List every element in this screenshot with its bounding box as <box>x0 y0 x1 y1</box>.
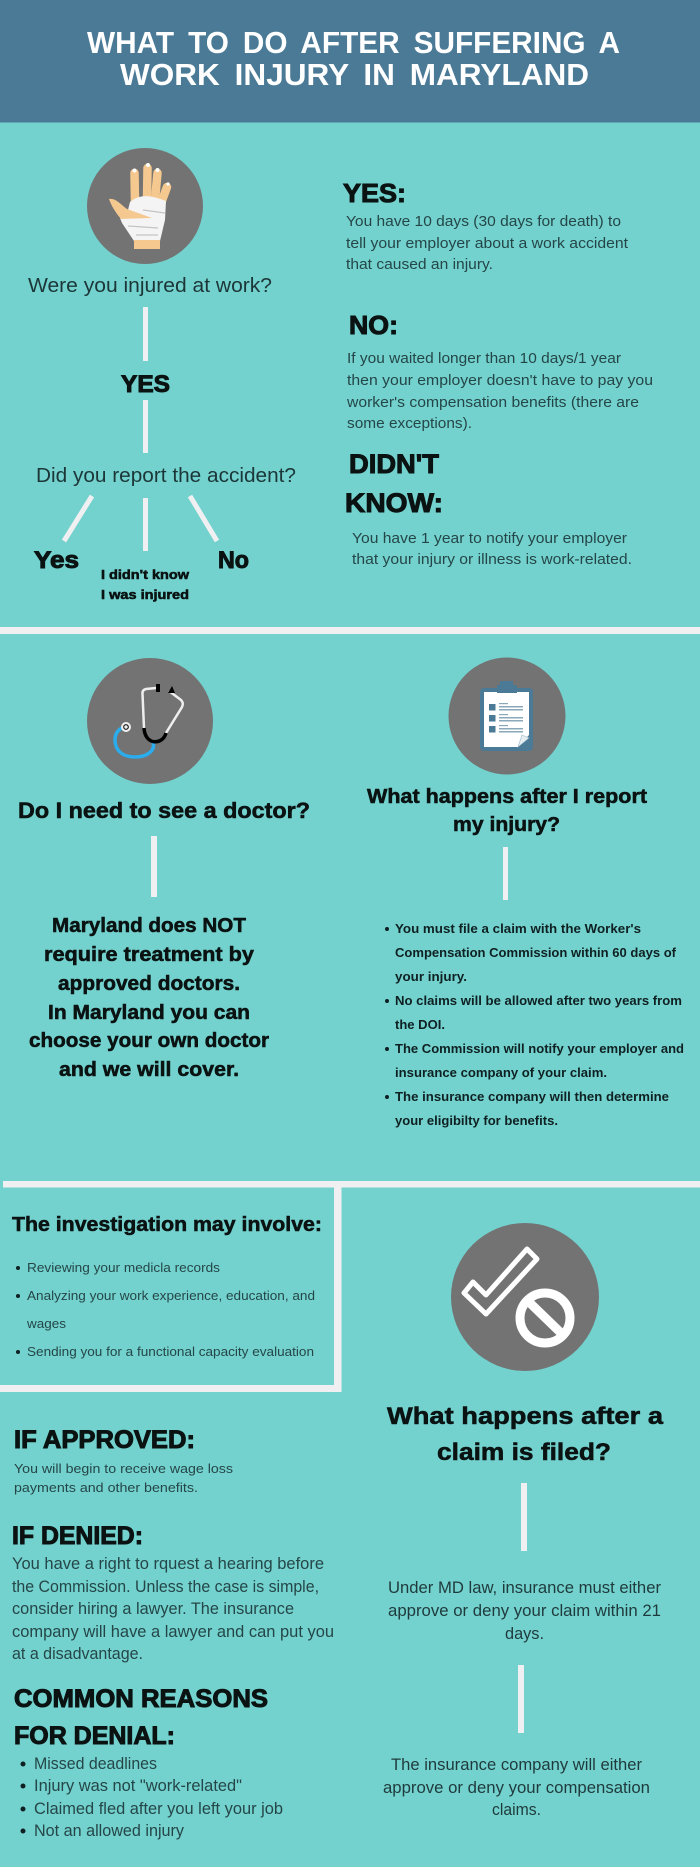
text: denied details <box>12 1555 334 1663</box>
connector line <box>143 400 148 453</box>
list: report steps: insurance company of your claim. <box>395 1065 607 1080</box>
header banner with title: WHAT TO DO AFTER SUFFERING A <box>87 25 620 60</box>
list: investigation items: Analyzing your work experience, education, and <box>27 1288 315 1303</box>
text: didn't know answer: You have 1 year to notify your employer <box>352 531 627 547</box>
text: denied details: the Commission. Unless the case is simple, <box>12 1578 319 1596</box>
text: no answer: some exceptions). <box>347 416 472 432</box>
icon: clipboard <box>448 658 566 774</box>
panel: approval and denial <box>12 1426 334 1840</box>
list: report steps <box>385 921 684 1128</box>
text: yes answer: tell your employer about a work accident <box>346 236 628 252</box>
text: yes answer: that caused an injury. <box>346 257 493 273</box>
header banner with title <box>0 0 700 122</box>
text: denied details: consider hiring a lawyer. The insurance <box>12 1600 294 1618</box>
answer: I didn't know: I was injured <box>101 587 189 602</box>
text: yes answer: You have 10 days (30 days for death) to <box>346 214 621 230</box>
text: no answer <box>346 351 653 432</box>
heading: NO: NO: <box>349 310 398 340</box>
answer: I didn't know: I didn't know <box>101 567 190 582</box>
text: no answer: then your employer doesn't have to pay you <box>347 373 653 389</box>
text: didn't know answer <box>352 531 632 568</box>
text: approved details: payments and other benefits. <box>14 1480 198 1495</box>
heading: DIDN'T KNOW <box>345 449 443 518</box>
text: 21 days rule: days. <box>505 1625 544 1643</box>
text: denied details: company will have a lawyer and can put you <box>12 1623 334 1641</box>
list: denial reasons <box>20 1755 283 1840</box>
connector line <box>521 1483 527 1551</box>
list: report steps: the DOI. <box>395 1017 445 1032</box>
list: investigation items: Sending you for a functional capacity evaluation <box>27 1344 314 1359</box>
list: report steps: You must file a claim with the Worker's <box>395 921 641 936</box>
text: Maryland doctor answer: and we will cover. <box>59 1058 239 1081</box>
text: denied details: You have a right to rquest a hearing before <box>12 1555 324 1573</box>
list: investigation items: Reviewing your medicla records <box>27 1260 220 1275</box>
panel: investigation box <box>0 1187 342 1392</box>
heading: common reasons: COMMON REASONS <box>14 1685 268 1713</box>
text: Maryland doctor answer: Maryland does NOT <box>52 914 246 937</box>
list: investigation items <box>16 1260 315 1359</box>
heading: claim filed: What happens after a <box>387 1403 663 1430</box>
question: report accident: Did you report the accident? <box>36 464 296 487</box>
answer: I didn't know <box>101 567 190 602</box>
panel: what happens after I report <box>367 658 684 1128</box>
text: approved details <box>14 1461 233 1495</box>
list: report steps: your eligibilty for benefits. <box>395 1113 558 1128</box>
text: 21 days rule: approve or deny your claim within 21 <box>388 1602 661 1620</box>
list: investigation items: wages <box>26 1316 66 1331</box>
heading: after I report <box>367 785 647 836</box>
text: insurer decision: approve or deny your compensation <box>383 1779 650 1797</box>
list: denial reasons: Missed deadlines <box>34 1755 157 1773</box>
list: denial reasons: Not an allowed injury <box>34 1822 185 1840</box>
connector line <box>151 836 157 897</box>
text: Maryland doctor answer: choose your own doctor <box>29 1029 269 1052</box>
heading: after I report: my injury? <box>453 813 560 836</box>
list: report steps: No claims will be allowed after two years from <box>395 993 682 1008</box>
text: Maryland doctor answer <box>29 914 269 1081</box>
text: insurer decision <box>383 1756 650 1819</box>
question: injured at work: Were you injured at work? <box>28 274 272 297</box>
header banner with title: WORK INJURY IN MARYLAND <box>120 57 589 92</box>
heading: if approved: IF APPROVED: <box>14 1426 195 1454</box>
heading: claim filed: claim is filed? <box>437 1439 611 1466</box>
text: approved details: You will begin to receive wage loss <box>14 1461 233 1476</box>
panel: what happens after a claim is filed <box>383 1223 663 1819</box>
heading: common reasons: FOR DENIAL: <box>14 1722 175 1750</box>
text: yes answer <box>346 214 628 273</box>
heading: investigation: The investigation may involve: <box>12 1213 322 1236</box>
label: YES: YES <box>121 371 170 398</box>
text: insurer decision: The insurance company will either <box>391 1756 643 1774</box>
panel: right column answers <box>343 178 653 568</box>
connector line <box>518 1665 524 1733</box>
heading: common reasons <box>14 1685 268 1750</box>
text: Maryland doctor answer: In Maryland you can <box>48 1001 250 1024</box>
list: denial reasons: Injury was not "work-related" <box>34 1777 242 1795</box>
heading: YES: YES: <box>343 178 406 208</box>
heading: doctor question: Do I need to see a doctor? <box>18 798 310 823</box>
answer: No: No <box>218 547 249 574</box>
text: no answer: If you waited longer than 10 days/1 year <box>347 351 621 367</box>
text: denied details: at a disadvantage. <box>12 1645 143 1663</box>
text: didn't know answer: that your injury or illness is work-related. <box>352 552 632 568</box>
text: no answer: worker's compensation benefits (there are <box>346 395 639 411</box>
answer: Yes: Yes <box>34 547 79 574</box>
heading: if denied: IF DENIED: <box>12 1522 143 1550</box>
list: report steps: The insurance company will then determine <box>395 1089 669 1104</box>
icon: check and prohibition sign <box>451 1223 599 1371</box>
panel: were you injured flow <box>28 148 296 602</box>
list: denial reasons: Claimed fled after you left your job <box>34 1800 283 1818</box>
text: 21 days rule <box>388 1579 662 1643</box>
heading: DIDN'T KNOW: KNOW: <box>345 488 443 518</box>
icon: stethoscope <box>87 658 213 784</box>
connector line <box>503 847 508 900</box>
text: 21 days rule: Under MD law, insurance must either <box>388 1579 662 1597</box>
list: report steps: Compensation Commission within 60 days of <box>395 945 677 960</box>
heading: after I report: What happens after I report <box>367 785 647 808</box>
branching lines <box>64 496 217 551</box>
icon: bandaged hand <box>87 148 203 264</box>
text: insurer decision: claims. <box>492 1801 541 1819</box>
list: report steps: The Commission will notify your employer and <box>395 1041 684 1056</box>
text: Maryland doctor answer: approved doctors. <box>58 972 240 995</box>
connector line <box>143 307 148 361</box>
heading: claim filed <box>387 1403 663 1466</box>
heading: DIDN'T KNOW: DIDN'T <box>349 449 440 479</box>
list: report steps: your injury. <box>395 969 467 984</box>
panel: do I need to see a doctor <box>18 658 310 1081</box>
text: Maryland doctor answer: require treatment by <box>44 943 255 966</box>
